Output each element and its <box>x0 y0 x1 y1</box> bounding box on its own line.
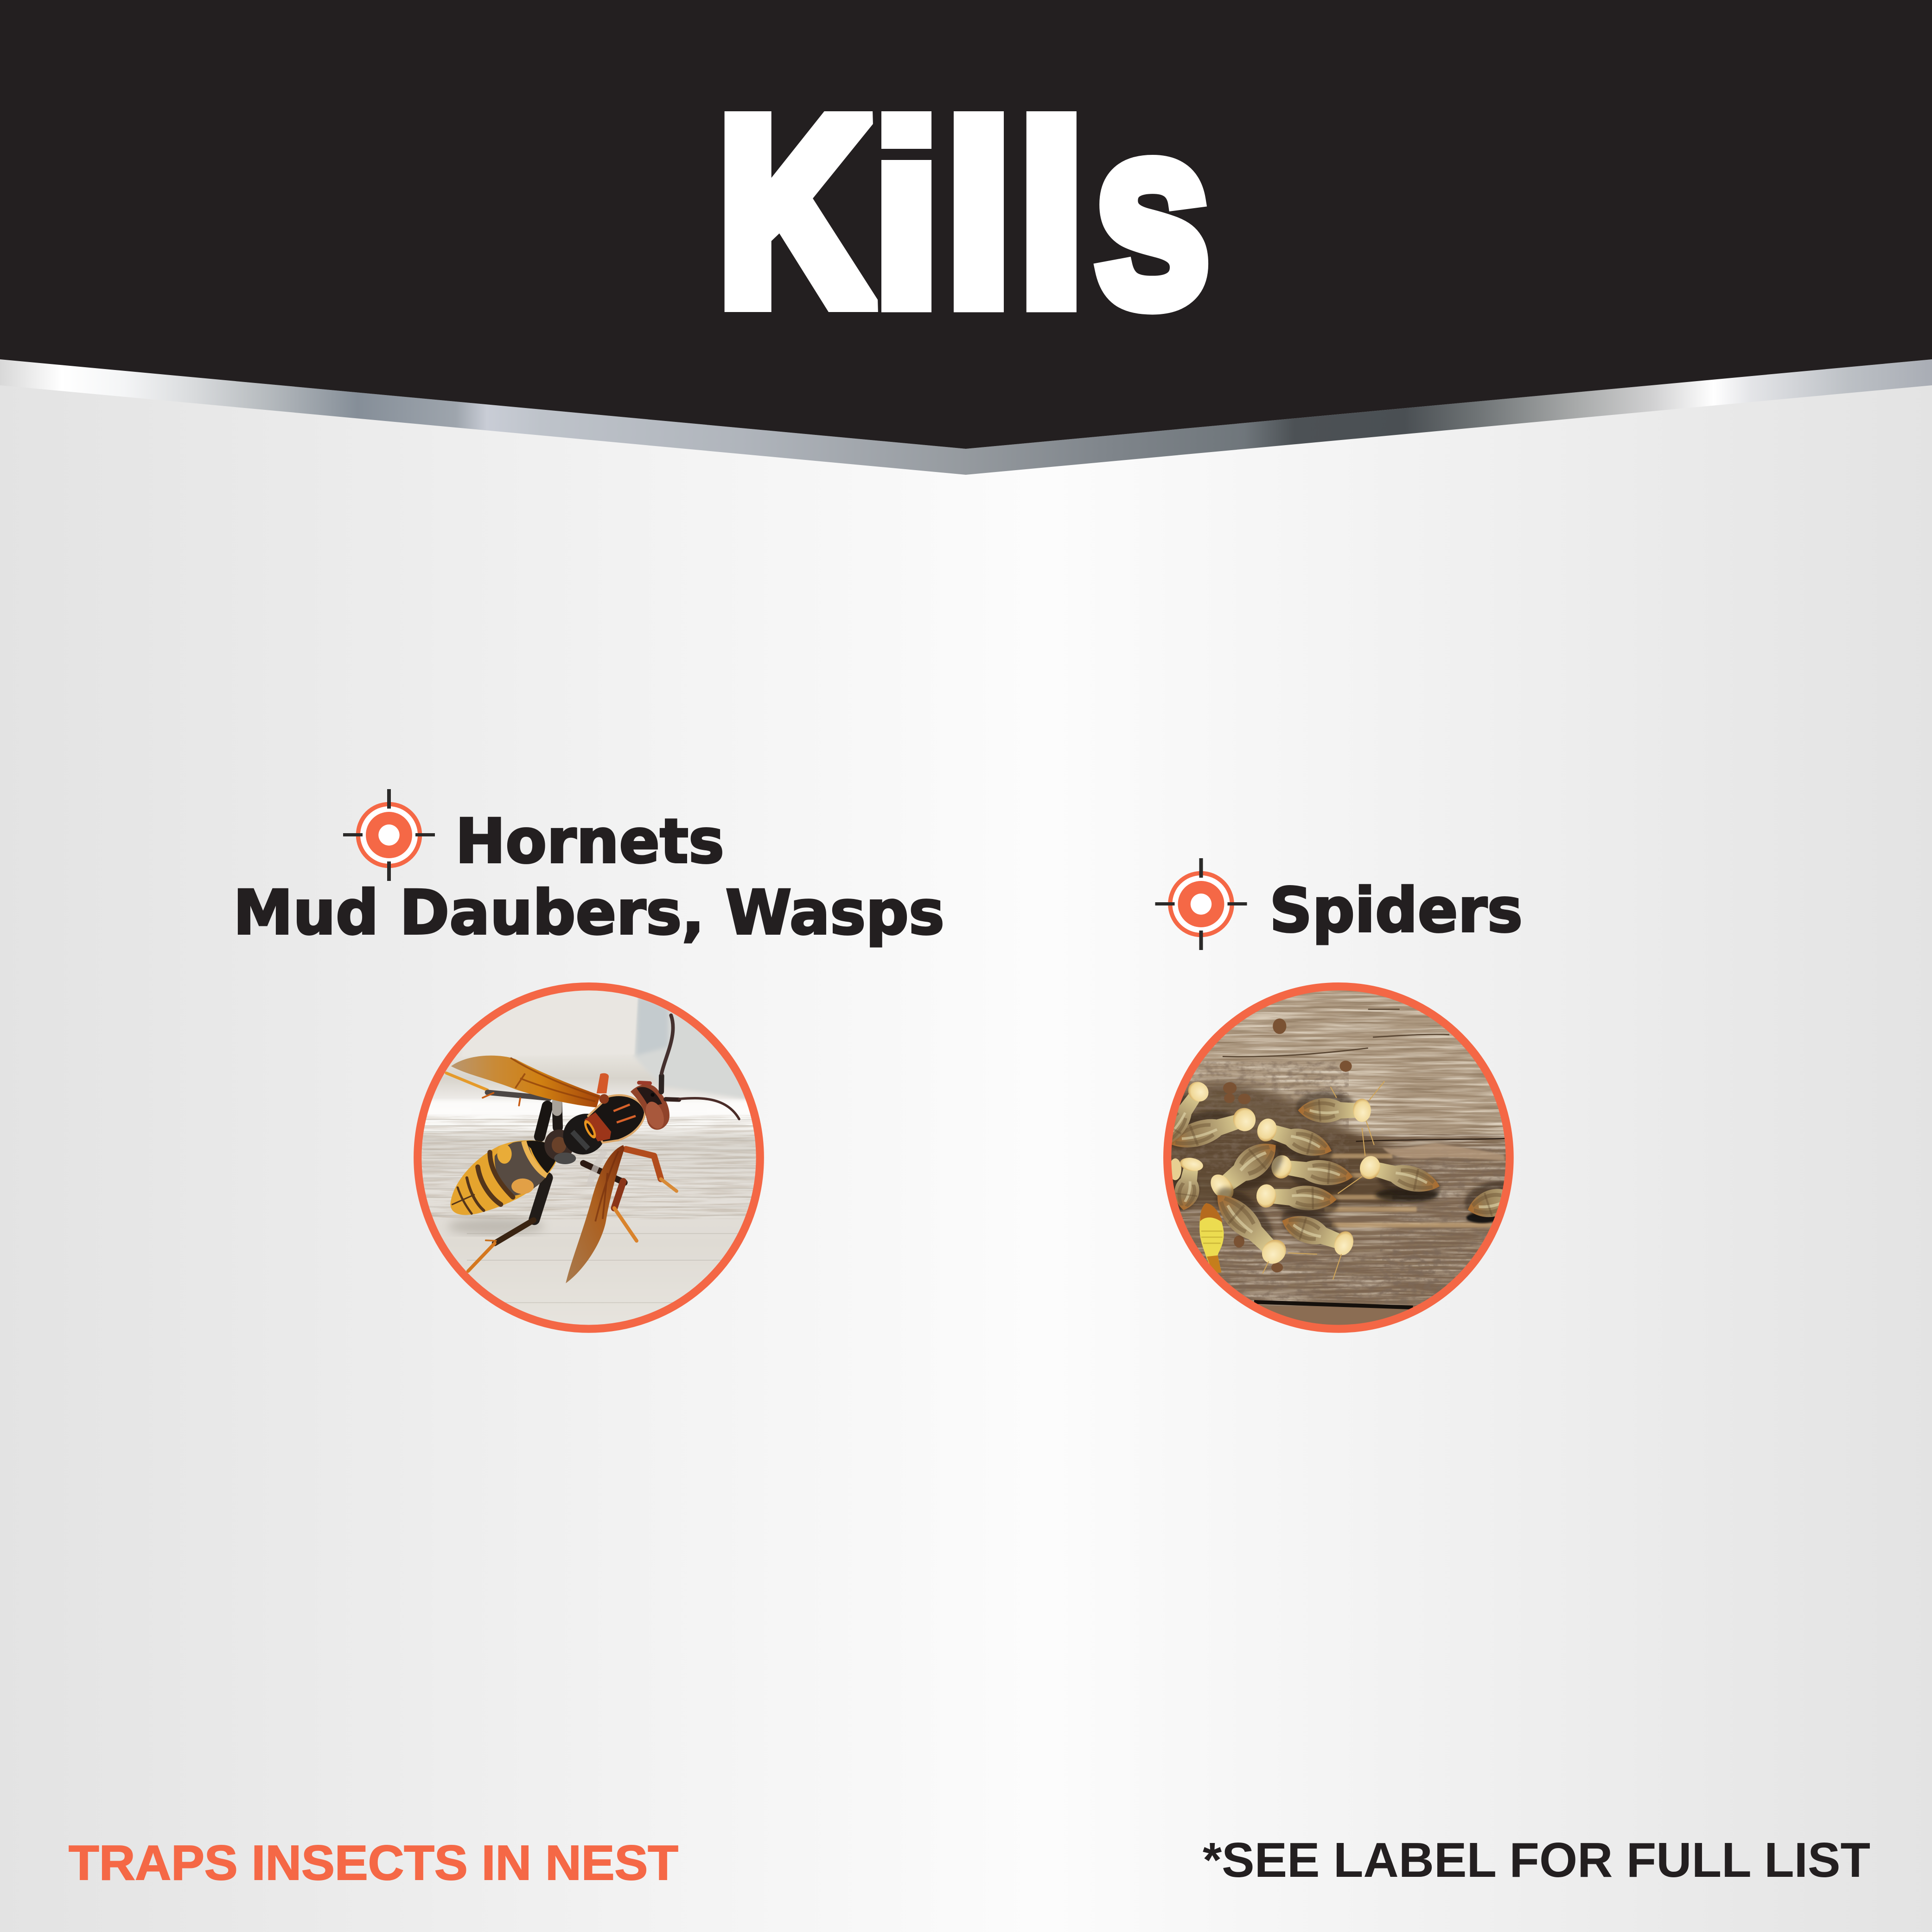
heading: Spiders: Spiders <box>1269 875 1523 946</box>
heading: Mud Daubers, Wasps: Mud Daubers, Wasps <box>233 877 944 949</box>
footnote: see label for full list: *SEE LABEL FOR FULL LIST <box>1203 1833 1870 1887</box>
title: Kills: s <box>1093 66 1211 361</box>
yellow termite <box>1199 1203 1224 1274</box>
title: Kills <box>724 111 1208 315</box>
metallic chevron band <box>0 359 1932 475</box>
title: Kills: l <box>1024 71 1079 351</box>
debris pebbles <box>1223 1019 1352 1272</box>
photo: wasp in orange ring <box>418 986 763 1329</box>
termite group <box>1144 1074 1540 1274</box>
wasp lower wing <box>566 1145 625 1283</box>
photo: termites on wood in orange ring <box>1144 986 1540 1329</box>
wasp upper wing <box>451 1056 600 1108</box>
icon: target crosshair hornets <box>343 789 435 881</box>
title: Kills: K <box>719 65 870 357</box>
wasp hind wing strip <box>446 1073 549 1105</box>
title: Kills: l <box>951 71 1007 351</box>
icon: target crosshair spiders <box>1155 858 1247 950</box>
black header banner <box>0 0 1932 449</box>
footer claim: traps insects in nest: TRAPS INSECTS IN NEST <box>69 1836 678 1890</box>
wasp thorax and head <box>544 1129 574 1160</box>
wasp abdomen <box>450 1140 557 1215</box>
heading: Hornets: Hornets <box>455 806 724 877</box>
title: Kills: i <box>879 71 934 351</box>
wasp legs behind body <box>468 1100 676 1271</box>
